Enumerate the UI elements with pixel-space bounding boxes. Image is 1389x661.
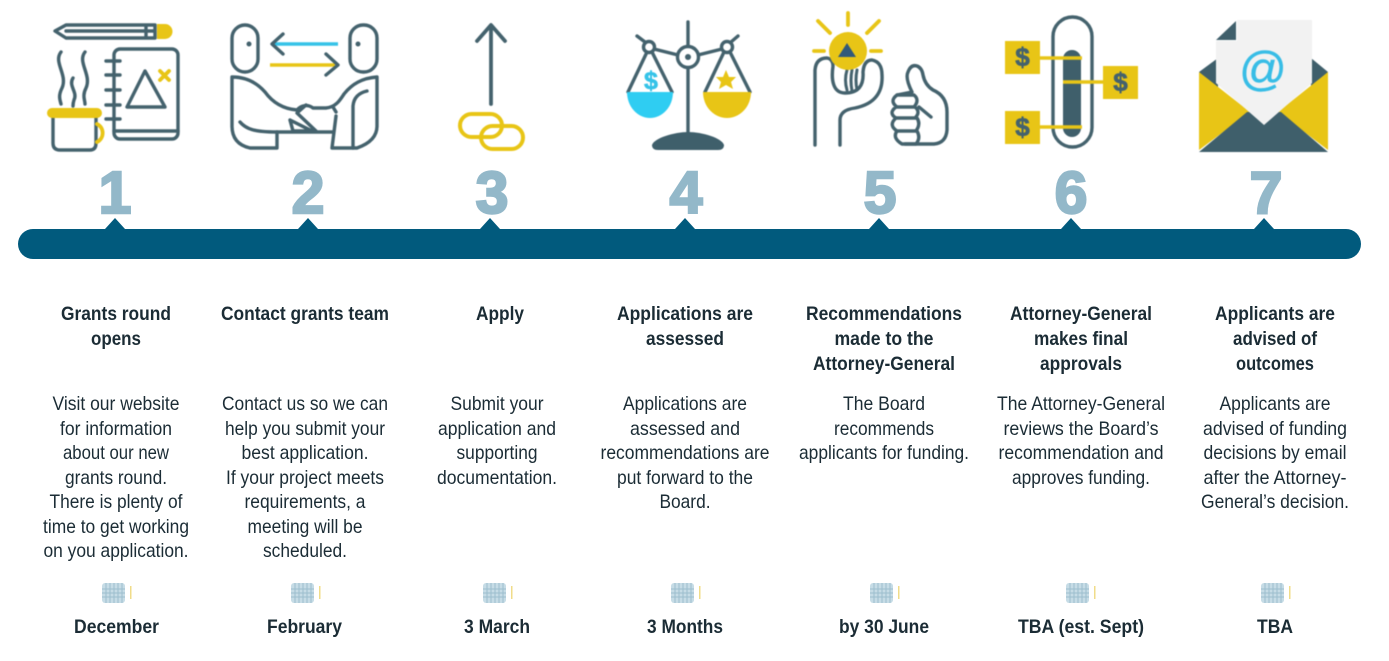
description: supporting: [456, 442, 538, 464]
number 5: 5: [864, 160, 896, 226]
description: Applications are: [623, 393, 747, 415]
heading: makes final: [1034, 328, 1128, 350]
step 4: applications are assessed: [600, 22, 770, 638]
description: Submit your: [450, 393, 544, 415]
heading: Attorney-General: [1010, 303, 1152, 325]
icon: paperclip with dollar notes: $: [1113, 67, 1128, 97]
date: 3 Months: [647, 616, 723, 638]
icon: balance scales: $: [644, 67, 658, 95]
date: December: [74, 616, 159, 638]
date: 3 March: [464, 616, 530, 638]
icon: calendar: [870, 583, 900, 603]
description: Board.: [660, 491, 710, 513]
description: about our new: [63, 442, 170, 464]
description: Applicants are: [1220, 393, 1330, 415]
description: There is plenty of: [50, 491, 183, 513]
icon: paperclip with dollar notes: $: [1015, 42, 1030, 72]
description: recommendation and: [998, 442, 1164, 464]
description: The Board: [843, 393, 925, 415]
description: advised of funding: [1203, 418, 1347, 440]
heading: [1010, 303, 1152, 375]
icon: calendar: [1066, 583, 1096, 603]
icon: paperclip with dollar notes: [1005, 17, 1138, 147]
number 6: 6: [1055, 160, 1087, 226]
icon: calendar: [671, 583, 700, 603]
icon: open envelope with email: @: [1239, 42, 1287, 95]
step 2: contact grants team: [221, 25, 389, 638]
description: The Attorney-General: [997, 393, 1165, 415]
heading: [61, 303, 171, 350]
icon: handshake with arrows: [232, 25, 377, 148]
description: [222, 393, 388, 562]
heading: Grants round: [61, 303, 171, 325]
description: [1201, 393, 1349, 513]
description: for information: [60, 418, 172, 440]
description: approves funding.: [1012, 467, 1150, 489]
heading: Applicants are: [1215, 303, 1335, 325]
description: recommends: [834, 418, 934, 440]
description: scheduled.: [263, 540, 347, 562]
heading: [806, 303, 962, 375]
timeline bar: [18, 218, 1361, 259]
date: TBA (est. Sept): [1018, 616, 1144, 638]
heading: assessed: [646, 328, 724, 350]
description: Contact us so we can: [222, 393, 388, 415]
number 7: 7: [1250, 160, 1282, 226]
icon: balance scales: [627, 22, 751, 150]
description: requirements, a: [244, 491, 366, 513]
description: after the Attorney-: [1204, 467, 1346, 489]
heading: Applications are: [617, 303, 753, 325]
heading: Apply: [476, 303, 524, 325]
number 1: 1: [99, 160, 131, 226]
heading: opens: [91, 328, 141, 350]
icon: paperclip with dollar notes: $: [1015, 112, 1030, 142]
heading: advised of: [1233, 328, 1317, 350]
icon: calendar: [291, 583, 320, 603]
description: assessed and: [630, 418, 740, 440]
description: recommendations are: [600, 442, 770, 464]
icon: calendar: [483, 583, 512, 603]
description: reviews the Board’s: [1004, 418, 1159, 440]
description: [799, 393, 969, 464]
description: time to get working: [43, 516, 189, 538]
icon: hand with light bulb and thumbs up: [814, 13, 947, 145]
description: application and: [438, 418, 556, 440]
icon: calendar: [102, 583, 132, 603]
description: Visit our website: [52, 393, 180, 415]
step 6: final approvals: [997, 17, 1165, 638]
description: help you submit your: [225, 418, 385, 440]
step 3: apply: [437, 25, 557, 638]
description: best application.: [242, 442, 368, 464]
heading: outcomes: [1236, 353, 1314, 375]
step 5: recommendations made: [799, 13, 969, 638]
icon: open envelope with email: [1199, 20, 1328, 152]
icon: calendar: [1261, 583, 1290, 603]
date: February: [267, 616, 342, 638]
number 4: 4: [670, 160, 703, 226]
number 3: 3: [476, 160, 508, 226]
heading: Contact grants team: [221, 303, 389, 325]
description: [43, 393, 189, 562]
description: documentation.: [437, 467, 557, 489]
description: General’s decision.: [1201, 491, 1349, 513]
description: grants round.: [65, 467, 167, 489]
date: by 30 June: [839, 616, 929, 638]
description: [997, 393, 1165, 489]
heading: made to the: [834, 328, 934, 350]
heading: approvals: [1040, 353, 1122, 375]
description: [600, 393, 770, 513]
description: applicants for funding.: [799, 442, 969, 464]
description: decisions by email: [1204, 442, 1346, 464]
heading: [617, 303, 753, 350]
description: If your project meets: [226, 467, 384, 489]
description: put forward to the: [617, 467, 753, 489]
heading: [1215, 303, 1335, 375]
step 1: grants round opens: [43, 24, 189, 638]
step 7: applicants advised: [1199, 20, 1349, 638]
description: meeting will be: [248, 516, 362, 538]
date: TBA: [1257, 616, 1293, 638]
heading: Recommendations: [806, 303, 962, 325]
number 2: 2: [292, 160, 324, 226]
description: on you application.: [44, 540, 188, 562]
icon: arrow and chain link: [460, 25, 523, 149]
icon: pencil, notebook and coffee cup: [47, 24, 178, 150]
heading: Attorney-General: [813, 353, 955, 375]
description: [437, 393, 557, 489]
